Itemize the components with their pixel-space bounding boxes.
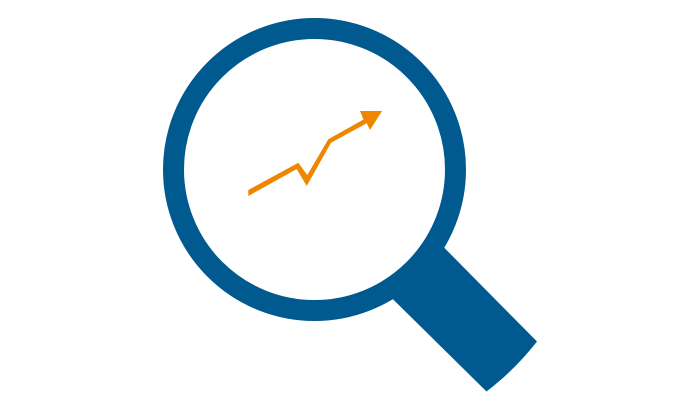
chart: rising trend arrow	[248, 111, 382, 196]
icon: magnifier lens ring	[174, 28, 456, 310]
icon: magnifier handle	[393, 248, 537, 392]
